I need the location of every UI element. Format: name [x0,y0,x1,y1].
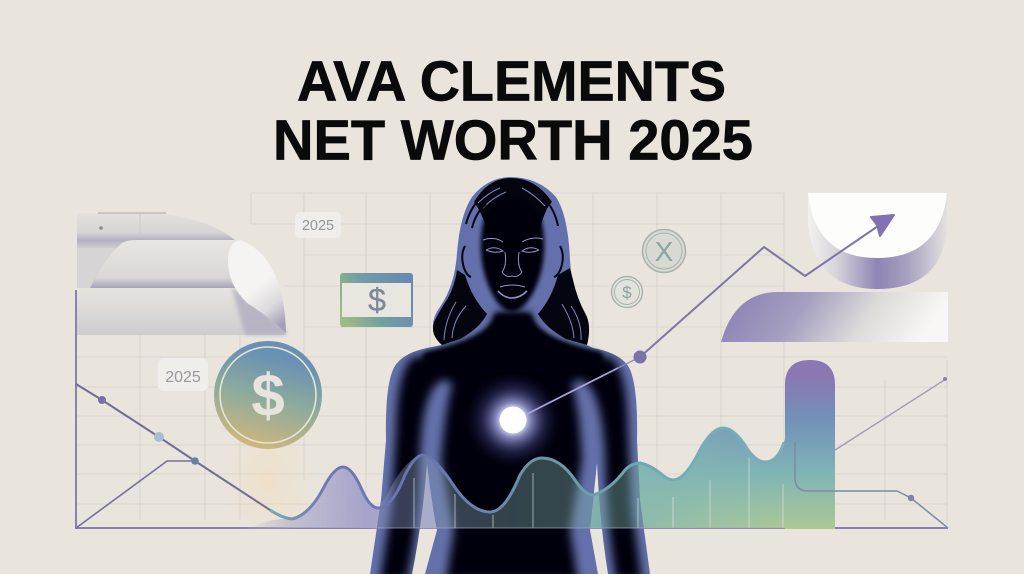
icon: small dollar coin: $ [622,283,632,302]
panel: layered paper shapes top left [77,213,286,335]
hair crown [474,178,552,228]
label: 2025 lower [158,358,208,391]
eyes, nose, lips [483,238,543,298]
arrow line anchor dot [634,350,646,364]
figure: woman silhouette [370,177,650,574]
icon: X coin [642,230,686,272]
chart: rising arrow line [640,215,894,357]
infographic canvas [75,60,948,574]
lower hair right [538,268,589,345]
label: 2025 lower: 2025 [165,369,201,386]
ears [462,246,563,277]
arrowhead [871,215,894,236]
title: AVA CLEMENTS [297,50,726,114]
label: 2025 upper [295,212,341,238]
title: NET WORTH 2025 [273,108,753,172]
panel: curved shapes top right [721,193,948,342]
chart: step line right [795,377,948,528]
warm glow beneath coin [220,418,316,542]
glowing chest point [466,357,640,467]
hair highlights [444,188,581,340]
chart: wave line [270,428,784,519]
chart: wave area behind figure [250,428,786,528]
chart: descending line left [76,384,292,528]
chart: thin value markers [414,458,783,528]
chart: translucent wave over figure [372,455,660,528]
chart axes [76,290,948,528]
white paper curl [228,240,286,333]
icon: small dollar coin [612,276,642,308]
icon: dollar card [340,273,413,327]
neck and shoulder yoke [423,314,603,372]
title [273,50,753,172]
dark hair strands [466,196,558,228]
icon: large dollar coin: $ [251,362,285,429]
face shadow [481,195,544,312]
inner body shadow [380,312,642,574]
icon: X coin: X [655,236,674,267]
background grid [76,193,947,525]
icon: large dollar coin [214,341,322,449]
label: 2025 upper: 2025 [302,218,334,234]
lower hair left [433,270,487,345]
chart baseline over figure [372,527,785,529]
chart: tall rounded bar [785,360,835,529]
hair and body base [370,177,650,574]
icon: dollar card: $ [368,282,386,318]
